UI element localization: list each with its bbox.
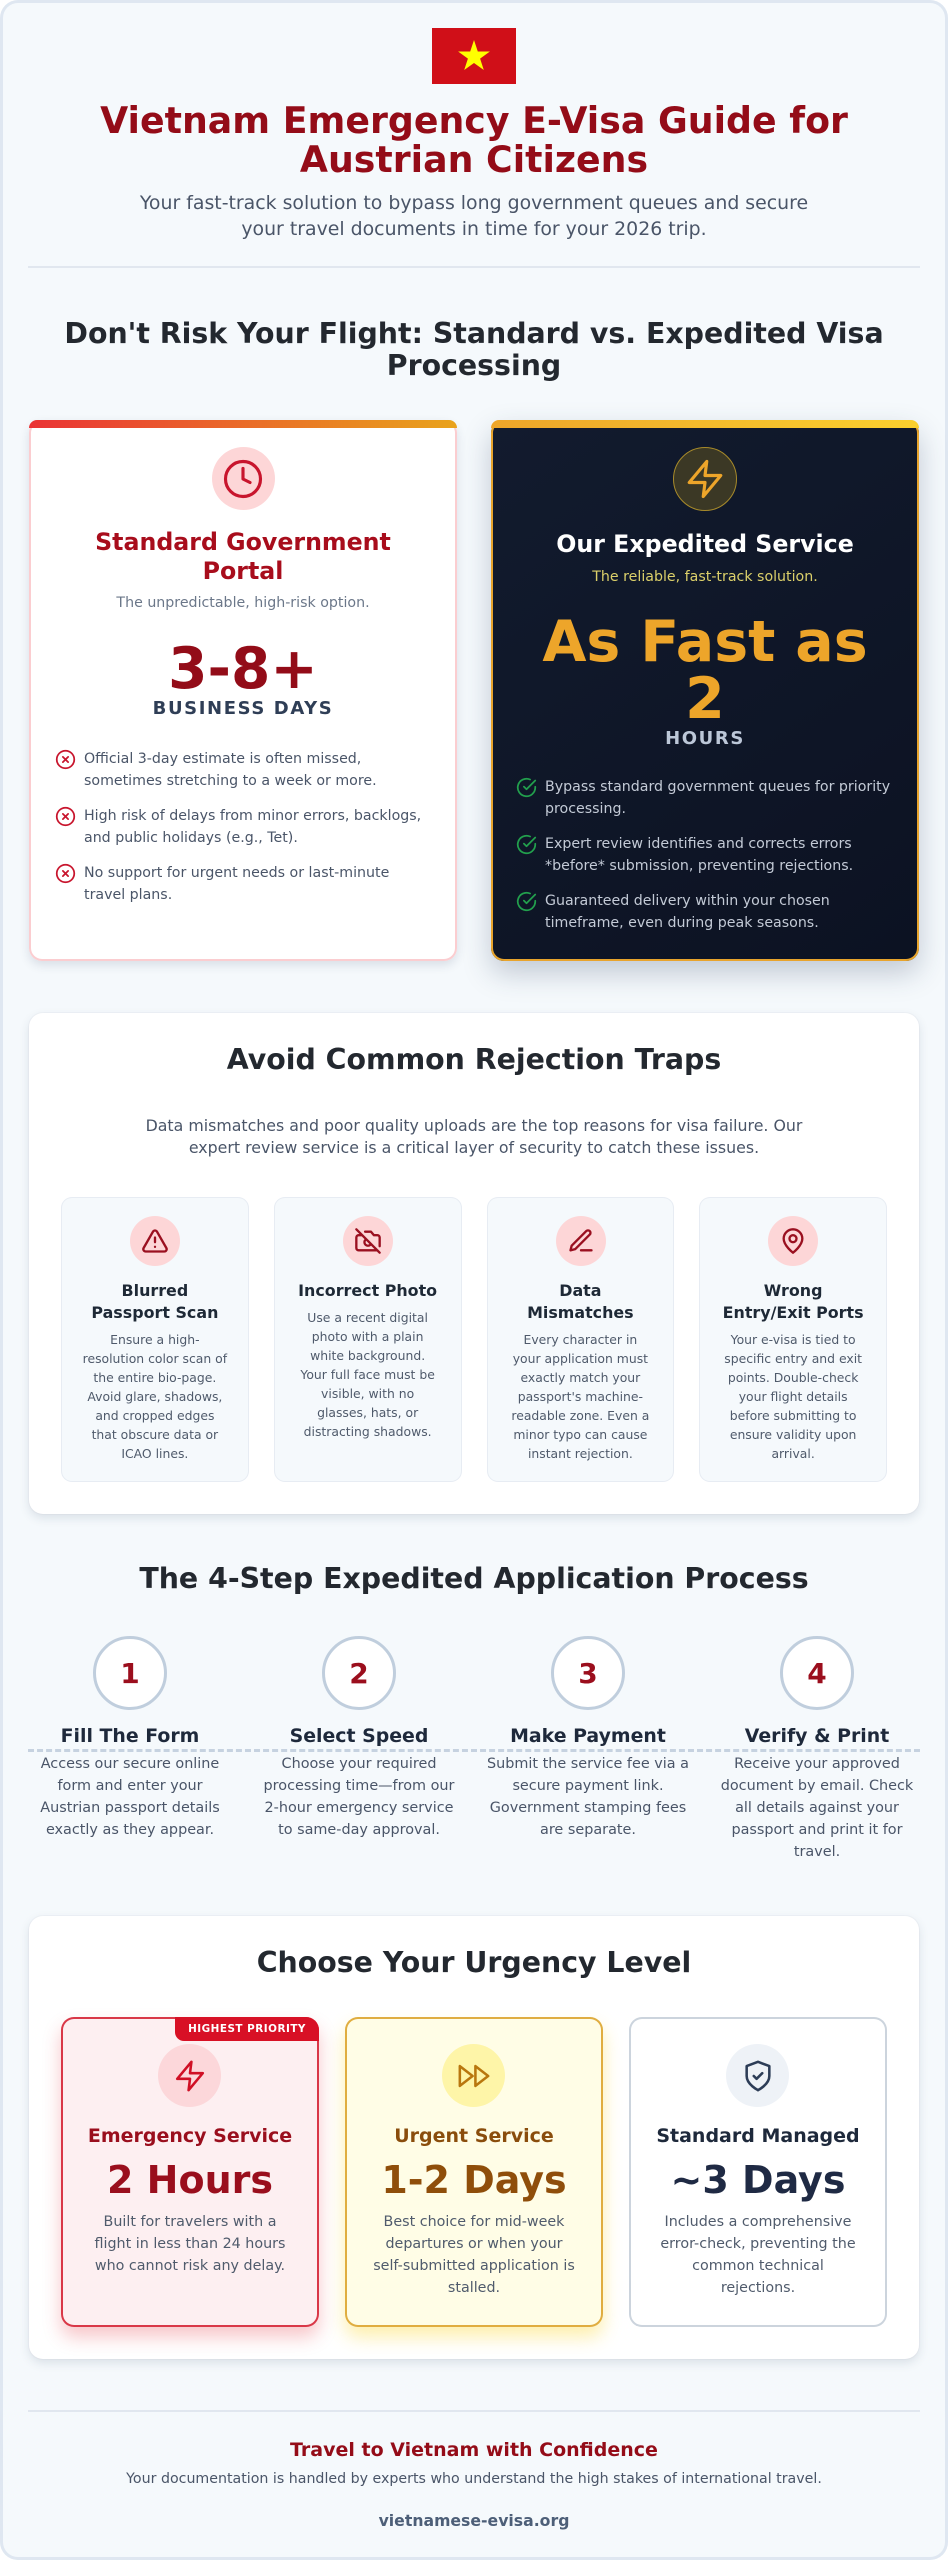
card title: Wrong (764, 1281, 822, 1300)
card text: visible, with no (321, 1386, 414, 1400)
card text: your flight details (739, 1388, 848, 1404)
card text: stalled. (448, 2280, 500, 2296)
card: emergency service (61, 2017, 319, 2327)
intro text: expert review service is a critical layer of security to catch these issues. (189, 1138, 759, 1157)
icon: pen (556, 1216, 606, 1266)
list item: guaranteed delivery (516, 892, 830, 930)
card text: white background. (310, 1348, 425, 1362)
card text: arrival. (771, 1446, 815, 1460)
step text (487, 1756, 689, 1838)
card title: Data (559, 1281, 601, 1300)
card text: that obscure data or (92, 1426, 218, 1442)
panel: avoid common rejection traps (29, 1013, 919, 1514)
time figure: As Fast as (542, 608, 868, 674)
step 3 (487, 1636, 689, 1838)
title: Austrian Citizens (300, 138, 648, 180)
step text: 2-hour emergency service (265, 1800, 453, 1816)
section: 4-step process (28, 1562, 920, 1860)
card text: rejections. (721, 2280, 795, 2296)
footer title: Travel to Vietnam with Confidence (290, 2439, 658, 2461)
subtitle: Your fast-track solution to bypass long government queues and secure (140, 192, 808, 214)
step text: Choose your required (282, 1756, 436, 1772)
card text: Ensure a high- (110, 1332, 200, 1346)
list item: delay risk (56, 806, 421, 846)
card title (723, 1281, 864, 1322)
icon: lightning bolt (158, 2044, 221, 2107)
header: flag and title block (28, 28, 920, 268)
step text: document by email. Check (721, 1778, 913, 1794)
step text: passport and print it for (731, 1822, 903, 1838)
card subtitle: The unpredictable, high-risk option. (116, 594, 370, 610)
card text: ensure validity upon (730, 1426, 856, 1442)
card text: error-check, preventing the (660, 2236, 856, 2252)
step 2 (264, 1636, 454, 1838)
card title (527, 1281, 634, 1322)
step number (93, 1636, 167, 1710)
card text: passport's machine- (518, 1388, 643, 1404)
card text: instant rejection. (528, 1446, 633, 1460)
card text: glasses, hats, or (317, 1404, 418, 1420)
step 4 (721, 1636, 914, 1860)
step number: 4 (807, 1656, 827, 1690)
list item: expert review (516, 834, 853, 874)
panel: choose your urgency level (29, 1916, 919, 2359)
list item: no support (56, 864, 389, 902)
card title: Passport Scan (91, 1303, 218, 1322)
card text: photo with a plain (312, 1328, 423, 1344)
card title (95, 528, 391, 585)
card: standard managed (629, 2017, 887, 2327)
card title: Portal (203, 557, 283, 585)
card text: ICAO lines. (121, 1446, 188, 1460)
heading: standard vs expedited: Don't Risk Your Flight: Standard vs. Expedited Visa (64, 316, 884, 350)
list item: expert review: *before* submission, preventing rejections. (545, 858, 853, 874)
step text: secure payment link. (512, 1778, 664, 1794)
icon: fast forward (442, 2044, 505, 2107)
card text: common technical (692, 2258, 824, 2274)
card text: flight in less than 24 hours (94, 2236, 286, 2252)
step text: Government stamping fees (490, 1800, 686, 1816)
card text: distracting shadows. (304, 1424, 432, 1438)
card title: Emergency Service (88, 2125, 292, 2147)
step number: 1 (120, 1656, 140, 1690)
card text (724, 1332, 862, 1460)
top gradient bar (491, 420, 919, 428)
footer (28, 2410, 920, 2540)
time unit: BUSINESS DAYS (153, 698, 333, 719)
step number: 3 (578, 1656, 598, 1690)
time figure: 2 Hours (107, 2158, 273, 2202)
card text: minor typo can cause (513, 1426, 647, 1442)
card title: Standard Managed (656, 2125, 860, 2147)
list item: delay risk: High risk of delays from minor errors, backlogs, (84, 808, 421, 824)
card text (511, 1332, 649, 1460)
card text (83, 1332, 228, 1460)
step text: are separate. (540, 1822, 636, 1838)
subtitle (140, 192, 808, 240)
card title: Standard Government (95, 528, 391, 556)
list item: guaranteed delivery: timeframe, even during peak seasons. (545, 914, 819, 930)
card text: Every character in (524, 1332, 637, 1346)
card title: Blurred (122, 1281, 188, 1300)
heading: standard vs expedited (64, 316, 884, 382)
card text: who cannot risk any delay. (95, 2258, 285, 2274)
card text (373, 2214, 575, 2296)
card text: specific entry and exit (724, 1350, 862, 1366)
step text: Austrian passport details (40, 1800, 220, 1816)
card text: Built for travelers with a (104, 2214, 276, 2230)
icon: shield check (726, 2044, 789, 2107)
badge: highest priority: HIGHEST PRIORITY (188, 2023, 306, 2035)
title (100, 99, 848, 180)
intro text: Data mismatches and poor quality uploads are the top reasons for visa failure. Our (146, 1116, 802, 1135)
card text: readable zone. Even a (511, 1408, 649, 1422)
website: vietnamese-evisa.org (379, 2511, 569, 2530)
heading: Avoid Common Rejection Traps (227, 1043, 721, 1076)
step title: Verify & Print (745, 1724, 889, 1746)
icon: lightning bolt (673, 447, 737, 511)
card: incorrect photo (274, 1197, 462, 1482)
heading: The 4-Step Expedited Application Process (139, 1562, 809, 1595)
step title: Make Payment (510, 1724, 666, 1746)
card title: Entry/Exit Ports (723, 1303, 864, 1322)
step number (322, 1636, 396, 1710)
icon: camera off (343, 1216, 393, 1266)
list item: expert review: Expert review identifies and corrects errors (545, 836, 852, 852)
card: blurred passport scan (61, 1197, 249, 1482)
list item: no support: No support for urgent needs or last-minute (84, 864, 389, 880)
card title: Our Expedited Service (556, 530, 854, 558)
step text: travel. (794, 1844, 840, 1860)
card subtitle: The reliable, fast-track solution. (592, 568, 818, 584)
step text: Receive your approved (734, 1756, 900, 1772)
time unit: HOURS (665, 728, 745, 749)
heading: standard vs expedited: Processing (387, 348, 561, 382)
icon: clock (212, 447, 274, 510)
card text: Includes a comprehensive (665, 2214, 851, 2230)
step text: form and enter your (57, 1778, 203, 1794)
card text (94, 2214, 286, 2274)
list item: bypass queues: processing. (545, 800, 626, 816)
card text: resolution color scan of (83, 1350, 227, 1366)
card text: exactly match your (521, 1370, 640, 1384)
footer text: Your documentation is handled by experts who understand the high stakes of international travel. (126, 2471, 822, 2487)
card text: Avoid glare, shadows, (87, 1388, 222, 1404)
top gradient bar (29, 420, 457, 428)
time figure: ~3 Days (671, 2158, 845, 2202)
step number: 2 (349, 1656, 369, 1690)
title: Vietnam Emergency E-Visa Guide for (100, 99, 848, 142)
card text: points. Double-check (728, 1370, 858, 1384)
panel: standard government portal (29, 420, 457, 961)
card text (660, 2214, 856, 2296)
icon: warning triangle (130, 1216, 180, 1266)
intro text (146, 1116, 802, 1157)
step text: exactly as they appear. (46, 1822, 214, 1838)
card text: Your full face must be (300, 1366, 435, 1382)
card text: your application must (513, 1350, 648, 1366)
step text: Access our secure online (41, 1756, 219, 1772)
list item: estimate missed: Official 3-day estimate is often missed, (84, 750, 361, 766)
card text (300, 1310, 435, 1438)
list item: no support: travel plans. (84, 886, 172, 902)
step text (264, 1756, 454, 1838)
card text: before submitting to (730, 1408, 856, 1422)
time figure: 3-8+ (168, 636, 318, 702)
list item: estimate missed (56, 750, 377, 788)
icon: Vietnam flag (432, 28, 516, 84)
time figure: 2 (685, 666, 725, 732)
step title: Fill The Form (61, 1724, 199, 1746)
step text: Submit the service fee via a (487, 1756, 689, 1772)
time figure (542, 608, 868, 732)
card title: Urgent Service (394, 2125, 554, 2147)
card title: Mismatches (527, 1303, 634, 1322)
step text (40, 1756, 220, 1838)
card title (91, 1281, 218, 1322)
step text (721, 1756, 914, 1860)
card text: Use a recent digital (307, 1310, 428, 1324)
card: urgent service (345, 2017, 603, 2327)
subtitle: your travel documents in time for your 2026 trip. (241, 218, 707, 240)
heading: Choose Your Urgency Level (257, 1946, 691, 1979)
card text: self-submitted application is (373, 2258, 575, 2274)
step number (551, 1636, 625, 1710)
list item: bypass queues: Bypass standard government queues for priority (545, 778, 890, 794)
time figure: 1-2 Days (381, 2158, 567, 2202)
step text: processing time—from our (264, 1778, 454, 1794)
icon: map pin (768, 1216, 818, 1266)
badge: highest priority (175, 2017, 319, 2041)
card text: the entire bio-page. (93, 1370, 216, 1384)
card: wrong entry exit ports (699, 1197, 887, 1482)
panel: our expedited service (491, 420, 919, 961)
card text: Your e-visa is tied to (731, 1332, 856, 1346)
card text: departures or when your (385, 2236, 563, 2252)
list item: estimate missed: sometimes stretching to a week or more. (84, 772, 377, 788)
card text: Best choice for mid-week (384, 2214, 564, 2230)
card text: and cropped edges (95, 1408, 214, 1422)
step 1 (40, 1636, 220, 1838)
card: data mismatches (486, 1197, 674, 1482)
list item: guaranteed delivery: Guaranteed delivery within your chosen (545, 892, 830, 908)
list item: delay risk: and public holidays (e.g., Tet). (84, 830, 298, 846)
step text: to same-day approval. (278, 1822, 440, 1838)
card title: Incorrect Photo (298, 1281, 437, 1300)
list item: bypass queues (516, 778, 890, 816)
step number (780, 1636, 854, 1710)
step title: Select Speed (290, 1724, 428, 1746)
step text: all details against your (735, 1800, 899, 1816)
